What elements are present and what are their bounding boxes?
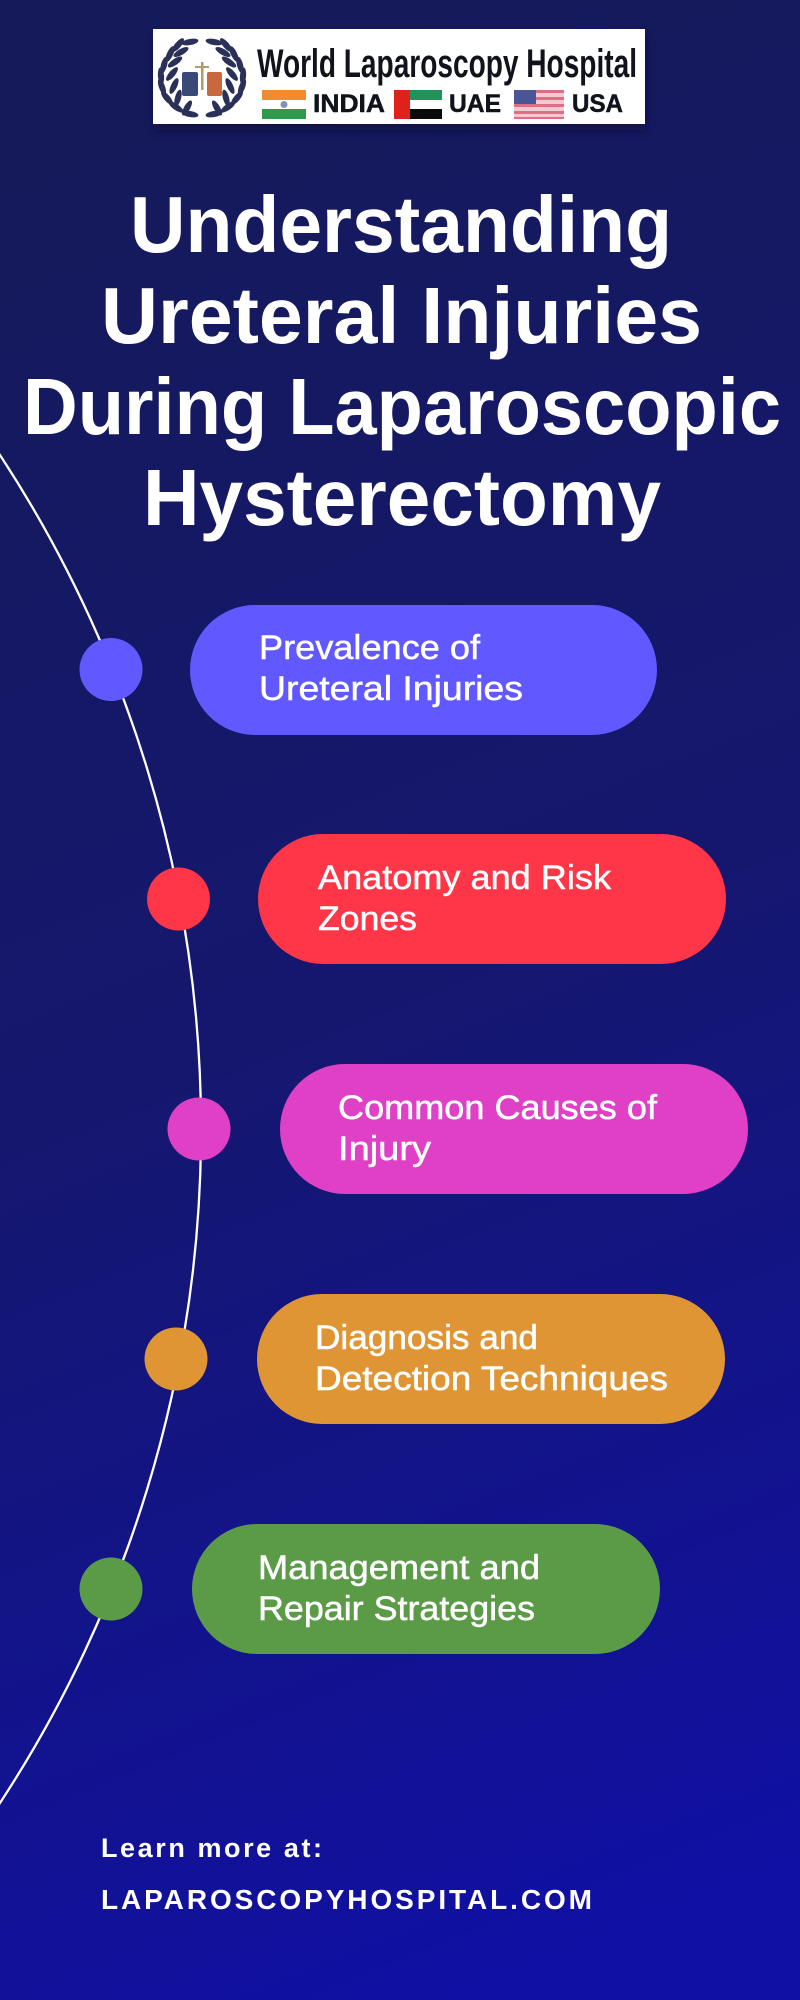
item 5: management <box>80 1524 660 1654</box>
pill 3 <box>280 1064 748 1194</box>
pill 5 text: Management and <box>258 1549 540 1587</box>
pill 4 text: Detection Techniques <box>315 1360 668 1398</box>
pill 4 text: Diagnosis and <box>315 1319 538 1357</box>
item 4: diagnosis <box>144 1294 725 1424</box>
title: During Laparoscopic <box>23 362 781 451</box>
pill 2 text: Zones <box>318 900 417 938</box>
footer call to action: LAPAROSCOPYHOSPITAL.COM <box>101 1884 592 1915</box>
pill 4 text <box>315 1319 668 1398</box>
logo name: World Laparoscopy Hospital <box>257 42 637 86</box>
marker dot 2 <box>147 868 210 930</box>
logo banner <box>153 29 645 130</box>
footer call to action <box>101 1833 592 1915</box>
pill 3 text: Common Causes of <box>338 1089 658 1127</box>
pill 5 <box>192 1524 660 1654</box>
item 3: causes <box>168 1064 748 1194</box>
pill 5 text <box>258 1549 540 1628</box>
marker dot 5 <box>80 1558 142 1620</box>
USA label: USA <box>572 90 623 118</box>
pill 3 text: Injury <box>338 1130 431 1168</box>
footer call to action: Learn more at: <box>101 1833 322 1863</box>
icon: USA flag <box>514 90 564 119</box>
pill 3 text <box>338 1089 658 1168</box>
pill 4 <box>257 1294 725 1424</box>
curved timeline line <box>0 452 201 1806</box>
marker dot 1 <box>80 638 142 701</box>
icon: India flag <box>262 90 306 119</box>
pill 1 text <box>259 629 523 708</box>
pill 5 text: Repair Strategies <box>258 1590 535 1628</box>
marker dot 4 <box>144 1328 208 1390</box>
title <box>23 180 781 542</box>
title: Understanding <box>130 180 672 269</box>
item 2: anatomy <box>147 834 726 964</box>
pill 1 <box>190 605 657 735</box>
title: Ureteral Injuries <box>101 271 702 360</box>
pill 2 <box>258 834 726 964</box>
pill 1 text: Ureteral Injuries <box>259 670 523 708</box>
UAE label: UAE <box>449 90 501 118</box>
item 1: prevalence <box>80 605 657 735</box>
icon: UAE flag <box>394 90 442 119</box>
marker dot 3 <box>168 1098 230 1160</box>
title: Hysterectomy <box>143 453 661 542</box>
pill 1 text: Prevalence of <box>259 629 481 667</box>
pill 2 text: Anatomy and Risk <box>318 859 612 897</box>
pill 2 text <box>318 859 612 938</box>
icon: laurel wreath crest <box>156 36 248 119</box>
India label: INDIA <box>313 90 385 118</box>
